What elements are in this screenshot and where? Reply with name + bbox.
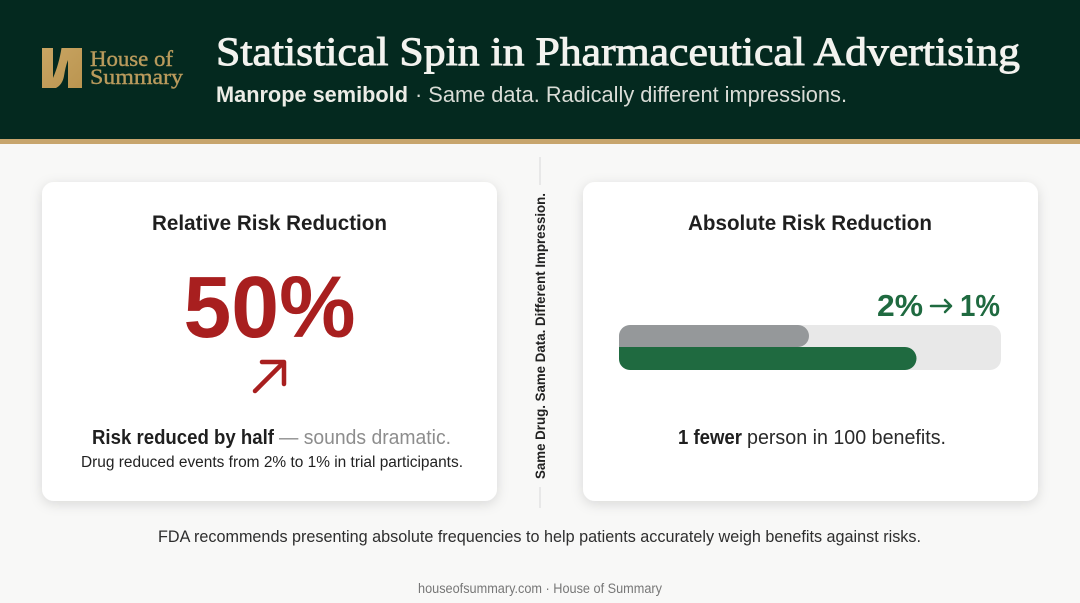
icon: logo mark xyxy=(42,48,82,88)
panel heading: Relative Risk Reduction xyxy=(152,211,387,235)
logo: House of Summary xyxy=(42,46,184,89)
bar chart xyxy=(619,325,1001,370)
logo wordmark: House of xyxy=(90,46,174,71)
subtitle: · Same data. Radically different impressions. xyxy=(415,82,847,107)
vertical caption: Same Drug. Same Data. Different Impression. xyxy=(532,193,548,479)
icon: arrow right xyxy=(931,300,951,312)
subtitle: Manrope semibold xyxy=(216,82,408,107)
panel: relative risk reduction xyxy=(42,182,497,501)
subtitle xyxy=(216,82,847,107)
stat: 2% to 1%: 2% xyxy=(877,288,923,323)
stat: 2% to 1%: 1% xyxy=(960,288,1000,323)
benefit statement: person in 100 benefits. xyxy=(747,427,946,449)
big stat: 50%: 50% xyxy=(184,259,356,356)
logo wordmark xyxy=(90,46,184,89)
risk claim: — sounds dramatic. xyxy=(279,427,451,449)
risk claim xyxy=(92,427,451,449)
benefit statement: 1 fewer xyxy=(678,427,742,449)
footer: houseofsummary.com · House of Summary xyxy=(418,581,662,596)
stat: 2% to 1% xyxy=(877,288,1000,323)
icon: arrow up right xyxy=(255,362,284,391)
title: Statistical Spin in Pharmaceutical Advertising xyxy=(216,29,1020,74)
logo wordmark: Summary xyxy=(90,64,184,89)
panel: absolute risk reduction xyxy=(583,182,1038,501)
supporting detail: Drug reduced events from 2% to 1% in trial participants. xyxy=(81,454,463,471)
panel heading: Absolute Risk Reduction xyxy=(688,211,932,235)
FDA recommendation: FDA recommends presenting absolute frequencies to help patients accurately weigh benefits against risks. xyxy=(158,528,921,546)
risk claim: Risk reduced by half xyxy=(92,427,274,449)
header band xyxy=(0,0,1080,144)
